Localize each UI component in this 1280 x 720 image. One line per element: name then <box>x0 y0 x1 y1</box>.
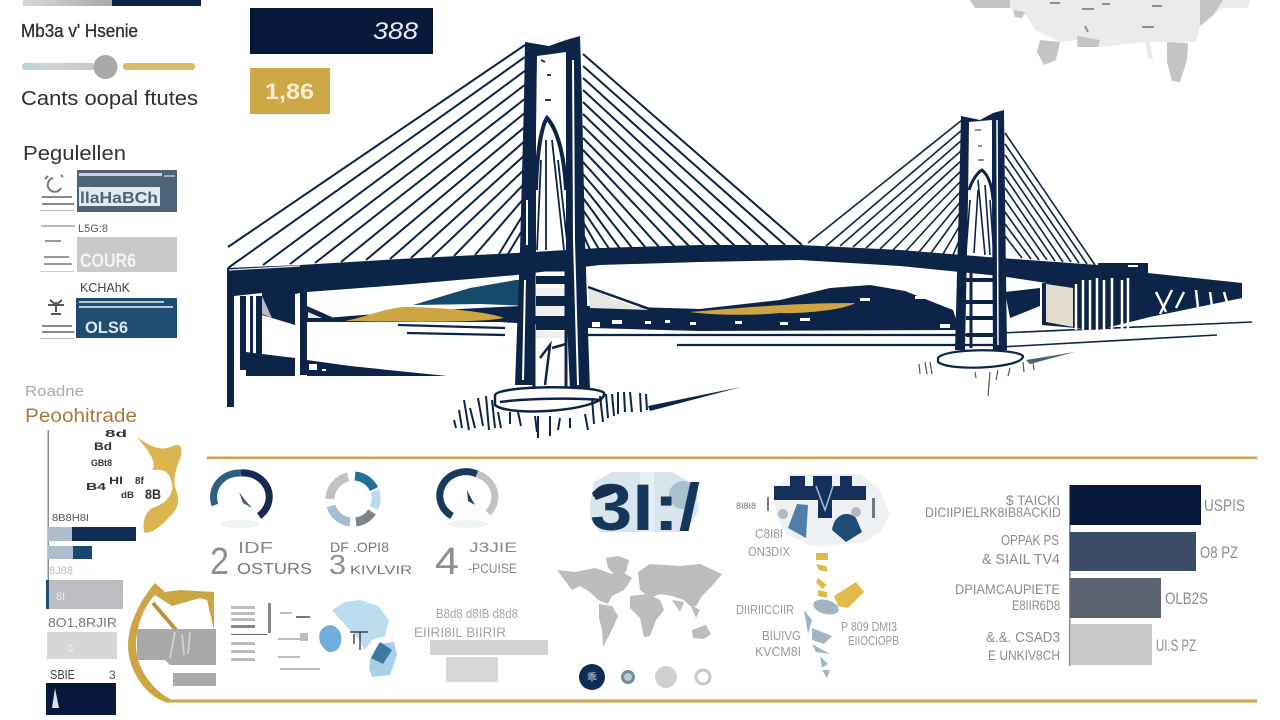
subheading: top left: Cants oopal ftutes <box>21 88 198 110</box>
stay cables: right tower <box>808 120 1095 265</box>
top progress bar <box>23 0 201 6</box>
water lines <box>398 325 1000 345</box>
scattered labels: 8B <box>145 486 161 502</box>
bar two <box>48 546 92 559</box>
scattered labels: dB <box>121 490 135 500</box>
text block: grey table: EIIRI8IL BIIRIR <box>414 624 506 640</box>
legend dots: 乖 <box>587 672 597 684</box>
bar row 3: OLB2S <box>1165 589 1208 608</box>
illustration: cable-stayed bridge <box>227 36 1252 438</box>
tower base: left <box>495 387 604 411</box>
stay cables: left tower <box>228 45 802 268</box>
panel: stacked boxes: SBIE <box>50 667 75 682</box>
distant shore silhouette <box>300 285 960 331</box>
stat box: navy <box>250 8 433 54</box>
stat row 2 <box>40 223 177 272</box>
infographic: vertical spine <box>736 474 899 678</box>
panel: gold blob diagram: 8B8H8I <box>52 513 89 524</box>
scattered labels: B4 <box>86 482 107 493</box>
stat box: gold: 1,86 <box>265 79 314 104</box>
shadow stroke right <box>1026 352 1075 364</box>
teal hill <box>413 280 530 306</box>
deck and hills <box>227 245 1252 407</box>
box navy <box>46 683 116 715</box>
left abutment and deck <box>227 245 1098 407</box>
bar row 3 <box>955 578 1208 618</box>
scattered labels: 8f <box>135 476 145 487</box>
axis <box>1069 485 1070 666</box>
gauge 1 <box>213 473 269 528</box>
spine labels: C8I8I <box>755 526 783 541</box>
shadow stroke <box>648 387 741 411</box>
gauge 3 label: -PCUISE <box>468 560 517 576</box>
bar chart <box>925 485 1245 666</box>
scattered labels: GBt8 <box>91 458 112 468</box>
gauge 2 label: 3 <box>329 549 346 580</box>
spine labels: ON3DIX <box>748 544 790 559</box>
stat row 3: KCHAhK <box>80 280 130 295</box>
scattered labels: Bd <box>94 441 112 453</box>
bar row 4: E UNKIV8CH <box>988 647 1060 663</box>
bar row 1: DICIIPIELRK8IB8ACKID <box>925 504 1061 520</box>
gauge 2: donut <box>330 476 376 522</box>
tower base: right <box>938 350 1023 368</box>
text block: grey table <box>414 606 548 682</box>
box grey: 8I <box>56 591 65 603</box>
stat row 2: L5G:8 <box>78 223 108 235</box>
bar row 3: E8IIR6D8 <box>1012 597 1060 613</box>
grass: left <box>454 392 647 438</box>
scattered labels <box>86 429 161 502</box>
stat box: navy: 388 <box>373 18 419 45</box>
bar row 1: USPIS <box>1204 496 1245 515</box>
panel: stacked boxes: 8O1,8RJIR <box>48 615 117 630</box>
spine labels: 8I8I8 <box>736 501 756 511</box>
divider: bottom gold rule <box>165 700 1257 702</box>
shore highlights <box>592 296 950 328</box>
gauge 3 label: 4 <box>435 541 459 583</box>
flow diagram: blue petals <box>231 600 397 677</box>
bar one <box>48 527 136 541</box>
label: sub-heading: Roadne <box>25 383 84 400</box>
bar row 1 <box>925 485 1245 525</box>
stat row 1 <box>40 170 177 212</box>
scattered labels: Hl <box>109 476 123 487</box>
gauge: gold with grey panel <box>128 583 216 702</box>
world map <box>557 556 722 647</box>
bar row 3: DPIAMCAUPIETE <box>955 581 1060 597</box>
bar row 1: $ TAICKI <box>1006 492 1060 508</box>
panel: gold blob diagram <box>48 429 181 608</box>
bar row 2: & SIAIL TV4 <box>982 551 1060 568</box>
panel: stat list <box>40 170 177 339</box>
right approach <box>1042 263 1242 330</box>
gauge 1 label <box>210 540 312 583</box>
slider <box>22 55 195 79</box>
panel: stacked boxes <box>46 580 123 715</box>
top emblem <box>767 474 890 546</box>
spine labels <box>736 501 899 659</box>
panel: stacked boxes: 3 <box>109 668 116 682</box>
spine labels: KVCM8I <box>755 644 801 659</box>
gauge 3 label <box>435 539 517 583</box>
spine labels: P 809 DMI3 <box>841 619 897 634</box>
divider: top gold rule <box>207 456 1257 459</box>
gauge 1 label: OSTURS <box>237 561 312 578</box>
stat box: gold <box>250 68 330 114</box>
gauge 3 <box>440 472 495 528</box>
gauge 1 label: IDF <box>238 540 273 557</box>
gauge 3 label: J3JIE <box>469 539 517 555</box>
spine labels: DIIRIICCIIR <box>736 602 794 617</box>
gauge 2 label: KIVLVIR <box>350 563 412 577</box>
scattered labels: 8d <box>105 429 127 440</box>
text block: grey table: B8d8 d8IB d8d8 <box>436 606 518 621</box>
stat row 3 <box>40 280 177 339</box>
grass: right <box>919 362 1034 396</box>
bar row 2: OPPAK PS <box>1001 532 1059 549</box>
gold band left <box>345 307 504 322</box>
spine segments <box>816 553 864 608</box>
gauge 2 label <box>329 539 412 580</box>
box light: 0 <box>67 643 73 655</box>
panel: gold blob diagram: 8J88 <box>49 565 73 577</box>
gauge 2 label: DF .OPI8 <box>330 539 389 555</box>
gauge 1 label: 2 <box>210 541 229 583</box>
gold band right <box>690 303 855 315</box>
gold blob <box>137 437 181 533</box>
lower band right of right tower <box>1005 288 1040 318</box>
bar row 2: O8 PZ <box>1200 543 1238 562</box>
bar row 4: UI.S PZ <box>1156 636 1196 655</box>
spine labels: EIIOCIOPB <box>848 633 899 648</box>
bar row 4: &.&. CSAD3 <box>986 629 1060 646</box>
legend dots <box>579 664 710 690</box>
stat row 1: llaHaBCh <box>80 190 158 207</box>
heading: percentage: Peoohitrade <box>25 406 137 427</box>
stat row 3: OLS6 <box>85 318 128 337</box>
petals <box>332 600 389 650</box>
big number graphic: 3I:/ <box>590 470 700 544</box>
spine labels: BIUIVG <box>762 628 801 643</box>
map: top right <box>970 0 1250 82</box>
tower: right <box>955 110 1007 352</box>
heading: top left: Mb3a v' Hsenie <box>21 21 138 41</box>
bar row 2 <box>982 532 1238 571</box>
table labels <box>231 603 320 670</box>
heading: population list: Pegulellen <box>23 143 126 165</box>
tower: left <box>515 36 590 390</box>
bar row 4 <box>986 624 1196 665</box>
stat row 2: COUR6 <box>80 251 136 272</box>
